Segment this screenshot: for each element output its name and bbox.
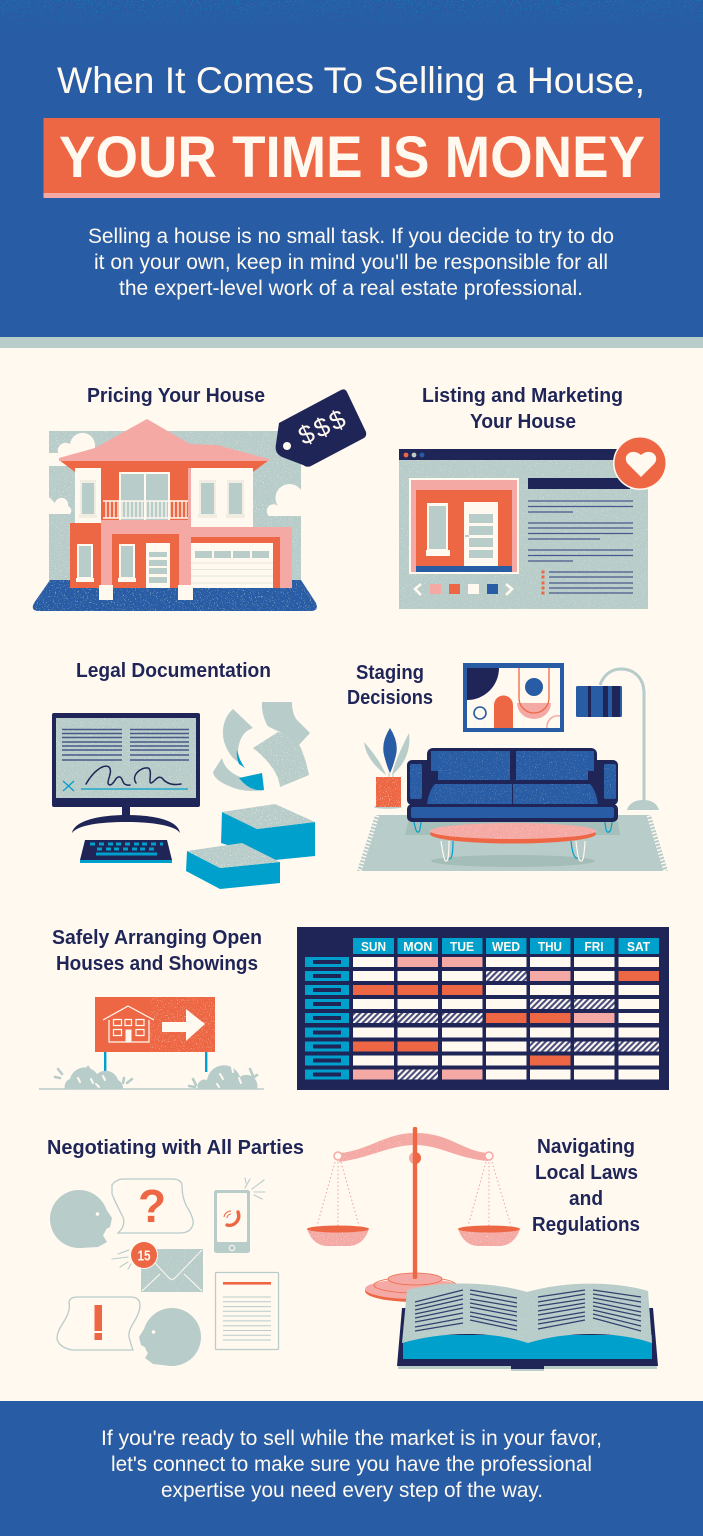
illustration: rug — [357, 815, 668, 871]
section: navigating local laws — [307, 1127, 658, 1371]
footer panel — [0, 1401, 703, 1536]
illustration: open book — [397, 1283, 658, 1371]
calendar hatched slots — [353, 971, 659, 1080]
heading: navigating local laws and regulations: Local Laws — [535, 1162, 638, 1184]
footer text: expertise you need every step of the way. — [161, 1479, 543, 1502]
illustration: wall art — [463, 663, 564, 732]
calendar day headers: SUN — [361, 940, 386, 954]
section: staging decisions — [347, 662, 668, 871]
calendar day headers: FRI — [584, 940, 604, 954]
intro paragraph: the expert-level work of a real estate professional. — [119, 277, 583, 300]
icon: floor lamp — [576, 669, 659, 810]
icon: envelope with notification badge: 15 — [138, 1248, 150, 1264]
section: negotiating with all parties — [47, 1137, 304, 1366]
illustration: sofa — [407, 748, 618, 832]
icon: contract document — [216, 1272, 278, 1350]
heading: staging decisions — [347, 662, 433, 709]
calendar orange slots — [353, 971, 659, 1066]
heading: open houses and showings — [52, 927, 262, 975]
calendar pink slots — [353, 957, 614, 1080]
illustration: website listing — [399, 449, 648, 609]
calendar row labels — [305, 957, 349, 1080]
icon: smartphone — [214, 1178, 265, 1253]
section: legal documentation — [52, 660, 315, 889]
illustration: house — [33, 419, 317, 611]
illustration: open house sign — [39, 997, 264, 1089]
calendar day headers: SAT — [627, 940, 650, 954]
speech bubble with exclamation mark — [57, 1297, 140, 1350]
heading: staging decisions: Decisions — [347, 687, 433, 709]
illustration: computer monitor — [52, 713, 200, 833]
title line: When It Comes To Selling a House, — [57, 60, 645, 101]
heading: pricing your house: Pricing Your House — [87, 385, 265, 407]
calendar day headers: TUE — [450, 940, 474, 954]
illustration: balance scale — [307, 1127, 520, 1302]
calendar day headers — [353, 938, 659, 954]
section: open houses and showings — [39, 927, 669, 1090]
heading: staging decisions: Staging — [356, 662, 424, 684]
illustration: coffee table — [430, 823, 596, 861]
heading: legal documentation: Legal Documentation — [76, 660, 271, 682]
illustration: speaking head 2 — [139, 1308, 201, 1366]
intro paragraph — [88, 225, 614, 300]
illustration: speaking head 1 — [50, 1190, 112, 1248]
calendar free slots — [353, 957, 659, 1080]
heading: open houses and showings: Safely Arranging Open — [52, 927, 262, 949]
heading: listing and marketing: Your House — [470, 411, 576, 433]
icon: price tag: $$$ — [294, 402, 352, 451]
icon: keyboard — [80, 840, 172, 863]
footer text: If you're ready to sell while the market is in your favor, — [101, 1427, 602, 1450]
heading: open houses and showings: Houses and Showings — [56, 953, 258, 975]
icon: heart badge — [613, 436, 667, 490]
heading: navigating local laws and regulations: and — [569, 1188, 603, 1210]
icon: envelope with notification badge — [112, 1241, 203, 1292]
intro paragraph: it on your own, keep in mind you'll be responsible for all — [94, 251, 608, 274]
calendar day headers: WED — [492, 940, 520, 954]
footer text — [101, 1427, 602, 1502]
header panel — [0, 0, 703, 337]
icon: document stacks — [186, 804, 315, 889]
footer text: let's connect to make sure you have the professional — [111, 1453, 592, 1476]
heading: navigating local laws and regulations — [532, 1136, 640, 1236]
heading: listing and marketing — [422, 385, 623, 433]
chart: weekly schedule calendar — [297, 927, 669, 1090]
section: pricing your house — [33, 385, 366, 611]
heading: negotiating with all parties: Negotiating with All Parties — [47, 1137, 304, 1159]
heading: navigating local laws and regulations: Regulations — [532, 1214, 640, 1236]
calendar day headers: MON — [403, 940, 432, 954]
calendar day headers: THU — [538, 940, 562, 954]
heading: navigating local laws and regulations: Navigating — [537, 1136, 635, 1158]
header divider strip — [0, 337, 703, 348]
heading: listing and marketing: Listing and Marketing — [422, 385, 623, 407]
icon: potted plant — [364, 728, 409, 809]
title banner: YOUR TIME IS MONEY — [59, 125, 645, 190]
speech bubble with question mark: ? — [138, 1180, 166, 1232]
speech bubble with question mark — [112, 1179, 193, 1233]
icon: flying papers — [213, 702, 310, 791]
icon: price tag — [276, 389, 366, 467]
intro paragraph: Selling a house is no small task. If you decide to try to do — [88, 225, 614, 248]
section: listing and marketing — [399, 385, 667, 609]
